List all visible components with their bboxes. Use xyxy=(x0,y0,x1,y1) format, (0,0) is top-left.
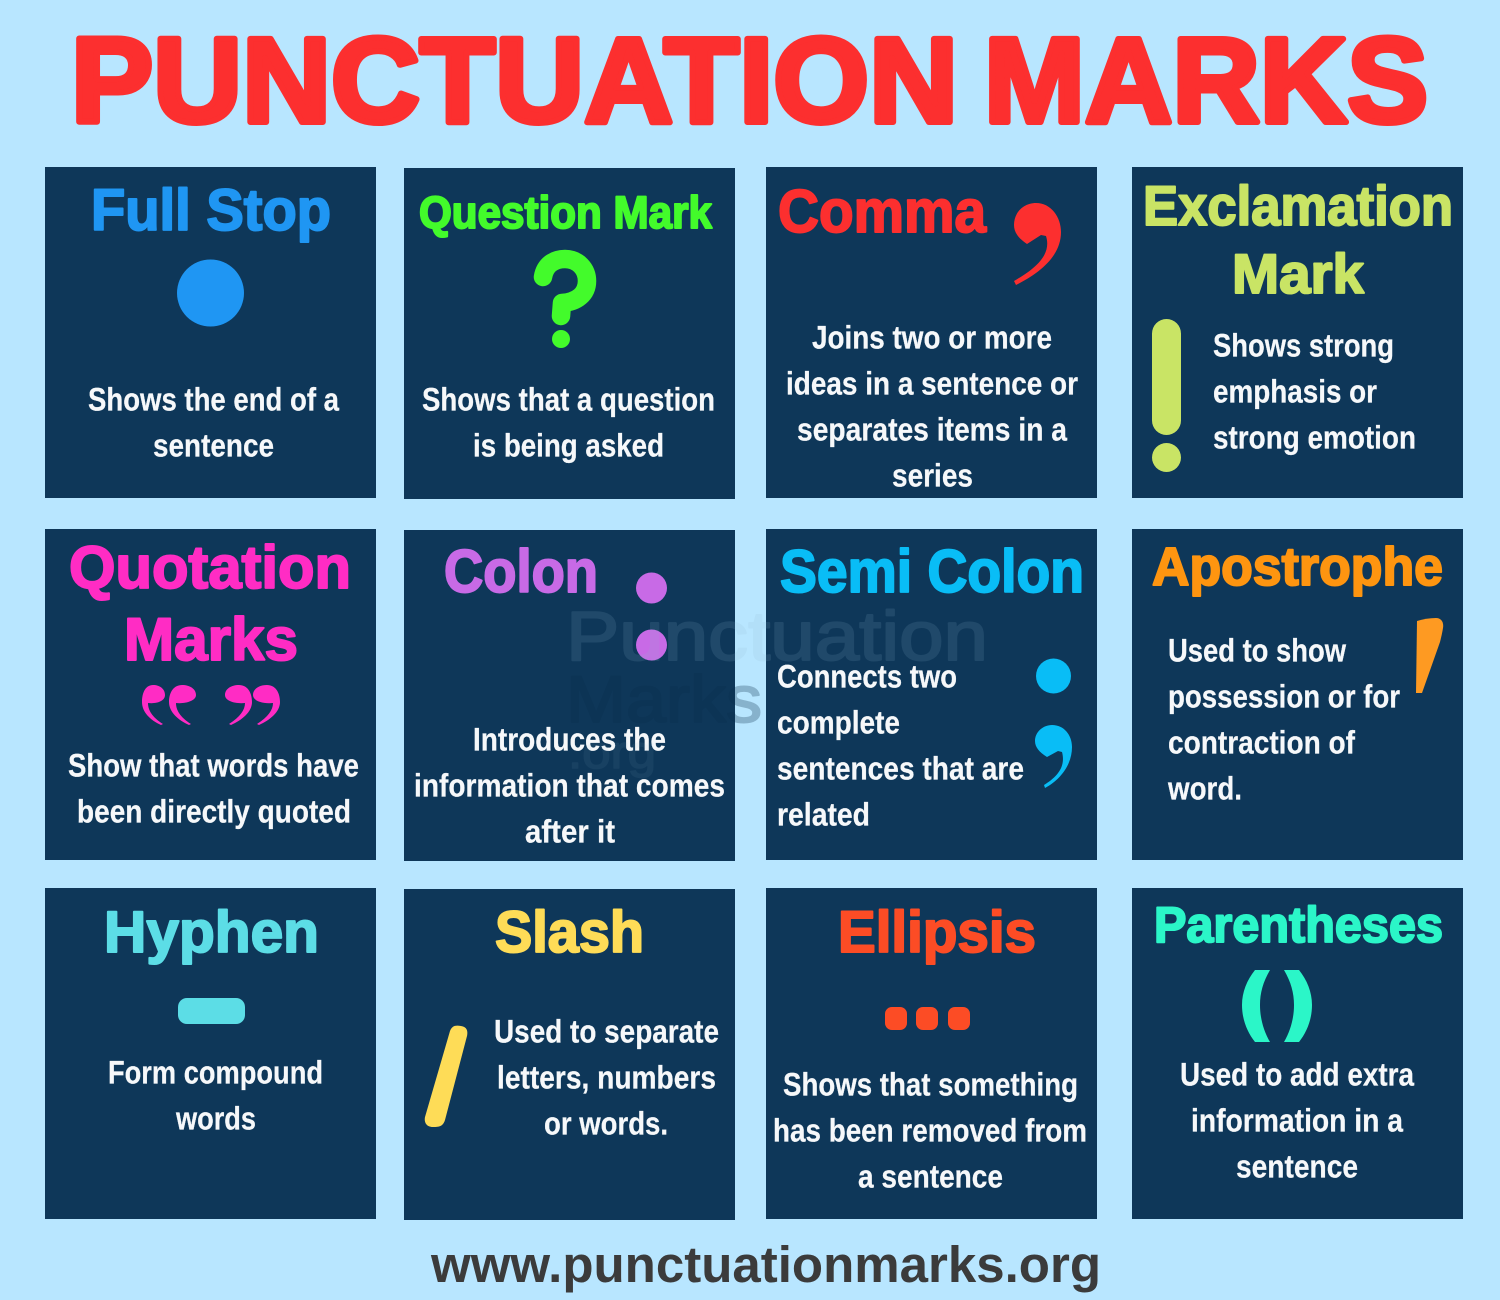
text: ellipsis description: has been removed from xyxy=(773,1112,1087,1148)
icon: quotation marks xyxy=(142,685,280,725)
icon: semi colon xyxy=(1035,658,1072,788)
heading: question mark: Question Mark xyxy=(419,187,713,238)
text: comma description: separates items in a xyxy=(797,411,1067,447)
text: quotation marks description: Show that words have xyxy=(68,747,359,783)
text: full stop description: Shows the end of a xyxy=(88,381,339,417)
text: question mark description: is being asked xyxy=(473,427,664,463)
text: comma description: Joins two or more xyxy=(812,319,1052,355)
icon: colon xyxy=(636,572,667,660)
panel: exclamation mark xyxy=(1132,167,1463,498)
heading: comma: Comma xyxy=(778,178,987,245)
text: comma description: series xyxy=(892,457,973,493)
heading: semi colon: Semi Colon xyxy=(780,538,1084,605)
icon: question mark xyxy=(543,259,587,348)
text: apostrophe description: Used to show xyxy=(1168,632,1346,668)
heading: exclamation mark xyxy=(1143,174,1453,305)
text: apostrophe description: possession or for xyxy=(1168,678,1400,714)
text: semi colon description xyxy=(777,658,1024,832)
heading: colon: Colon xyxy=(444,538,598,605)
heading: full stop: Full Stop xyxy=(91,178,331,243)
text: slash description xyxy=(494,1013,719,1141)
icon: slash xyxy=(425,1026,467,1127)
panel: hyphen xyxy=(45,888,376,1219)
title: MARKS xyxy=(984,12,1428,148)
heading: parentheses: Parentheses xyxy=(1154,897,1443,953)
panel: semi colon xyxy=(766,529,1097,860)
heading: exclamation mark: Exclamation xyxy=(1143,174,1453,237)
panel: ellipsis xyxy=(766,888,1097,1219)
watermark xyxy=(566,597,988,778)
heading: quotation marks: Quotation xyxy=(69,534,351,601)
title xyxy=(71,12,1428,148)
text: semi colon description: complete xyxy=(777,704,900,740)
text: semi colon description: related xyxy=(777,796,870,832)
text: slash description: Used to separate xyxy=(494,1013,719,1049)
text: ellipsis description xyxy=(773,1066,1087,1194)
heading: hyphen: Hyphen xyxy=(104,900,319,965)
heading: ellipsis: Ellipsis xyxy=(838,900,1036,965)
title: PUNCTUATION xyxy=(71,12,958,148)
text: full stop description: sentence xyxy=(153,427,274,463)
text: question mark description: Shows that a question xyxy=(422,381,715,417)
text: slash description: letters, numbers xyxy=(497,1059,716,1095)
heading: exclamation mark: Mark xyxy=(1232,242,1365,305)
text: exclamation mark description: emphasis or xyxy=(1213,373,1377,409)
panel: question mark xyxy=(404,168,735,499)
text: parentheses description: Used to add extra xyxy=(1180,1056,1414,1092)
text: ellipsis description: Shows that something xyxy=(783,1066,1078,1102)
text: apostrophe description: contraction of xyxy=(1168,724,1355,760)
text: exclamation mark description: strong emotion xyxy=(1213,419,1416,455)
text: semi colon description: Connects two xyxy=(777,658,957,694)
text: apostrophe description xyxy=(1167,632,1400,806)
icon: ellipsis xyxy=(885,1007,970,1030)
panel: quotation marks xyxy=(45,529,376,860)
text: ellipsis description: a sentence xyxy=(858,1158,1003,1194)
icon: full stop xyxy=(177,260,244,326)
heading: quotation marks: Marks xyxy=(124,606,298,673)
panel: colon xyxy=(404,530,735,861)
text: comma description: ideas in a sentence or xyxy=(786,365,1078,401)
panel: apostrophe xyxy=(1132,529,1463,860)
text: quotation marks description xyxy=(68,747,359,829)
heading: apostrophe: Apostrophe xyxy=(1152,537,1443,597)
text: exclamation mark description: Shows strong xyxy=(1213,327,1394,363)
icon: comma xyxy=(1014,203,1061,285)
icon: hyphen xyxy=(178,998,245,1024)
text: hyphen description: Form compound xyxy=(108,1054,323,1090)
text: semi colon description: sentences that are xyxy=(777,750,1024,786)
text: quotation marks description: been directly quoted xyxy=(77,793,351,829)
panel: parentheses xyxy=(1132,888,1463,1219)
text: colon description: information that comes xyxy=(414,767,725,803)
icon: exclamation mark xyxy=(1152,319,1181,472)
watermark: Punctuation xyxy=(566,597,988,675)
text: exclamation mark description xyxy=(1213,327,1416,455)
text: full stop description xyxy=(88,381,339,463)
text: apostrophe description: word. xyxy=(1167,770,1242,806)
text: parentheses description: information in a xyxy=(1191,1102,1403,1138)
heading: slash: Slash xyxy=(495,900,644,965)
text: parentheses description: sentence xyxy=(1236,1148,1358,1184)
watermark: .org xyxy=(568,726,656,778)
text: colon description xyxy=(414,721,725,849)
panel: comma xyxy=(766,167,1097,498)
panel: full stop xyxy=(45,167,376,498)
heading: quotation marks xyxy=(69,534,351,673)
footer url: www.punctuationmarks.org xyxy=(430,1236,1101,1293)
text: colon description: after it xyxy=(525,813,615,849)
text: parentheses description xyxy=(1180,1056,1414,1184)
icon: apostrophe xyxy=(1416,618,1443,693)
text: hyphen description xyxy=(108,1054,323,1136)
text: colon description: Introduces the xyxy=(473,721,666,757)
icon: parentheses xyxy=(1242,970,1312,1042)
text: hyphen description: words xyxy=(175,1100,256,1136)
text: comma description xyxy=(786,319,1078,493)
text: question mark description xyxy=(422,381,715,463)
text: slash description: or words. xyxy=(544,1105,668,1141)
watermark: Marks xyxy=(566,662,762,736)
panel: slash xyxy=(404,889,735,1220)
